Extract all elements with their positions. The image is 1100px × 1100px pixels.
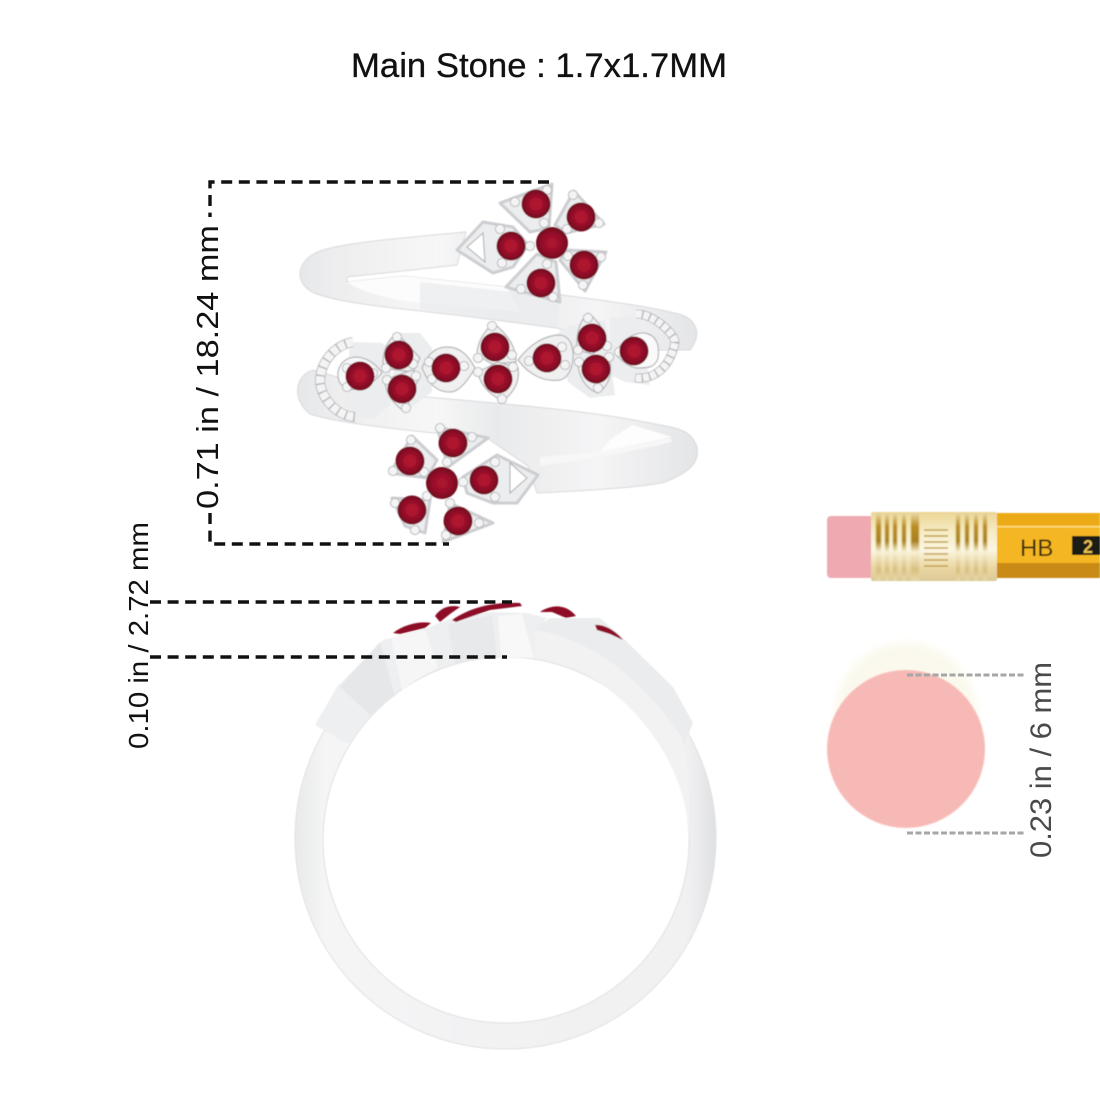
- ring: side view: [295, 603, 716, 1049]
- dimension: band width: [123, 522, 512, 749]
- ring: top view: [298, 184, 698, 542]
- right beaded medallion: [635, 314, 675, 378]
- pencil number: 2: [1083, 537, 1093, 557]
- upper band: [300, 232, 697, 350]
- right shoulder settings: [535, 618, 693, 745]
- dimension: ring height: [191, 182, 549, 544]
- lower band opening: [600, 425, 672, 452]
- top flower settings: [457, 184, 606, 302]
- label: ring height: 0.71 in / 18.24 mm: [191, 225, 225, 509]
- icon: eraser end: [827, 642, 985, 828]
- bottom flower settings: [390, 427, 538, 542]
- rubies: top flower: [496, 190, 598, 298]
- lower band: [298, 370, 698, 493]
- middle row backing: [345, 315, 650, 418]
- pencil grade label: HB: [1020, 535, 1053, 562]
- middle row teardrops and petals: [338, 313, 658, 412]
- label: band width: 0.10 in / 2.72 mm: [123, 522, 154, 749]
- shank: [295, 627, 716, 1049]
- title: Main Stone : 1.7x1.7MM: [351, 47, 727, 85]
- icon: pencil with eraser: [827, 512, 1100, 581]
- upper band interior: [347, 276, 520, 312]
- rubies: middle row: [346, 324, 648, 404]
- left beaded medallion: [320, 342, 355, 417]
- left shoulder settings: [315, 612, 547, 744]
- prongs: [342, 185, 624, 540]
- side rubies: [393, 603, 623, 640]
- rubies: bottom flower: [396, 428, 498, 536]
- dimension: eraser: [907, 662, 1058, 858]
- top flower opening: [467, 233, 485, 262]
- label: eraser: 0.23 in / 6 mm: [1025, 662, 1058, 858]
- bottom flower opening: [510, 463, 527, 493]
